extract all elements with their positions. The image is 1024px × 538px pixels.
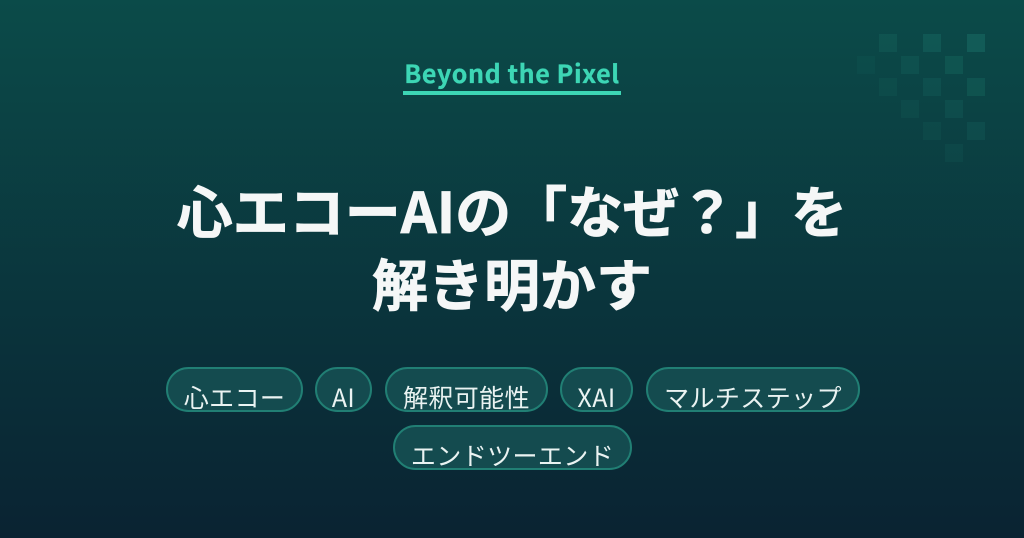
- tag: AI: AI: [332, 379, 355, 415]
- title: [177, 169, 847, 323]
- tag: 解釈可能性: 解釈可能性: [403, 379, 530, 415]
- tag: マルチステップ: [646, 367, 860, 412]
- tag: エンドツーエンド: [393, 425, 632, 470]
- tag: エンドツーエンド: エンドツーエンド: [411, 437, 614, 473]
- tag: 解釈可能性: [385, 367, 548, 412]
- tag: XAI: [560, 367, 633, 412]
- title: 心エコーAIの「なぜ？」を: [177, 169, 847, 250]
- tag: マルチステップ: マルチステップ: [664, 379, 842, 415]
- tag: XAI: XAI: [577, 379, 616, 415]
- tag list: [166, 367, 860, 473]
- brand label: Beyond the Pixel: Beyond the Pixel: [404, 55, 620, 91]
- tag: AI: [315, 367, 372, 412]
- icon: decorative pixel grid: [879, 34, 985, 140]
- tag: 心エコー: 心エコー: [184, 379, 285, 415]
- tag: 心エコー: [166, 367, 303, 412]
- title: 解き明かす: [372, 242, 652, 323]
